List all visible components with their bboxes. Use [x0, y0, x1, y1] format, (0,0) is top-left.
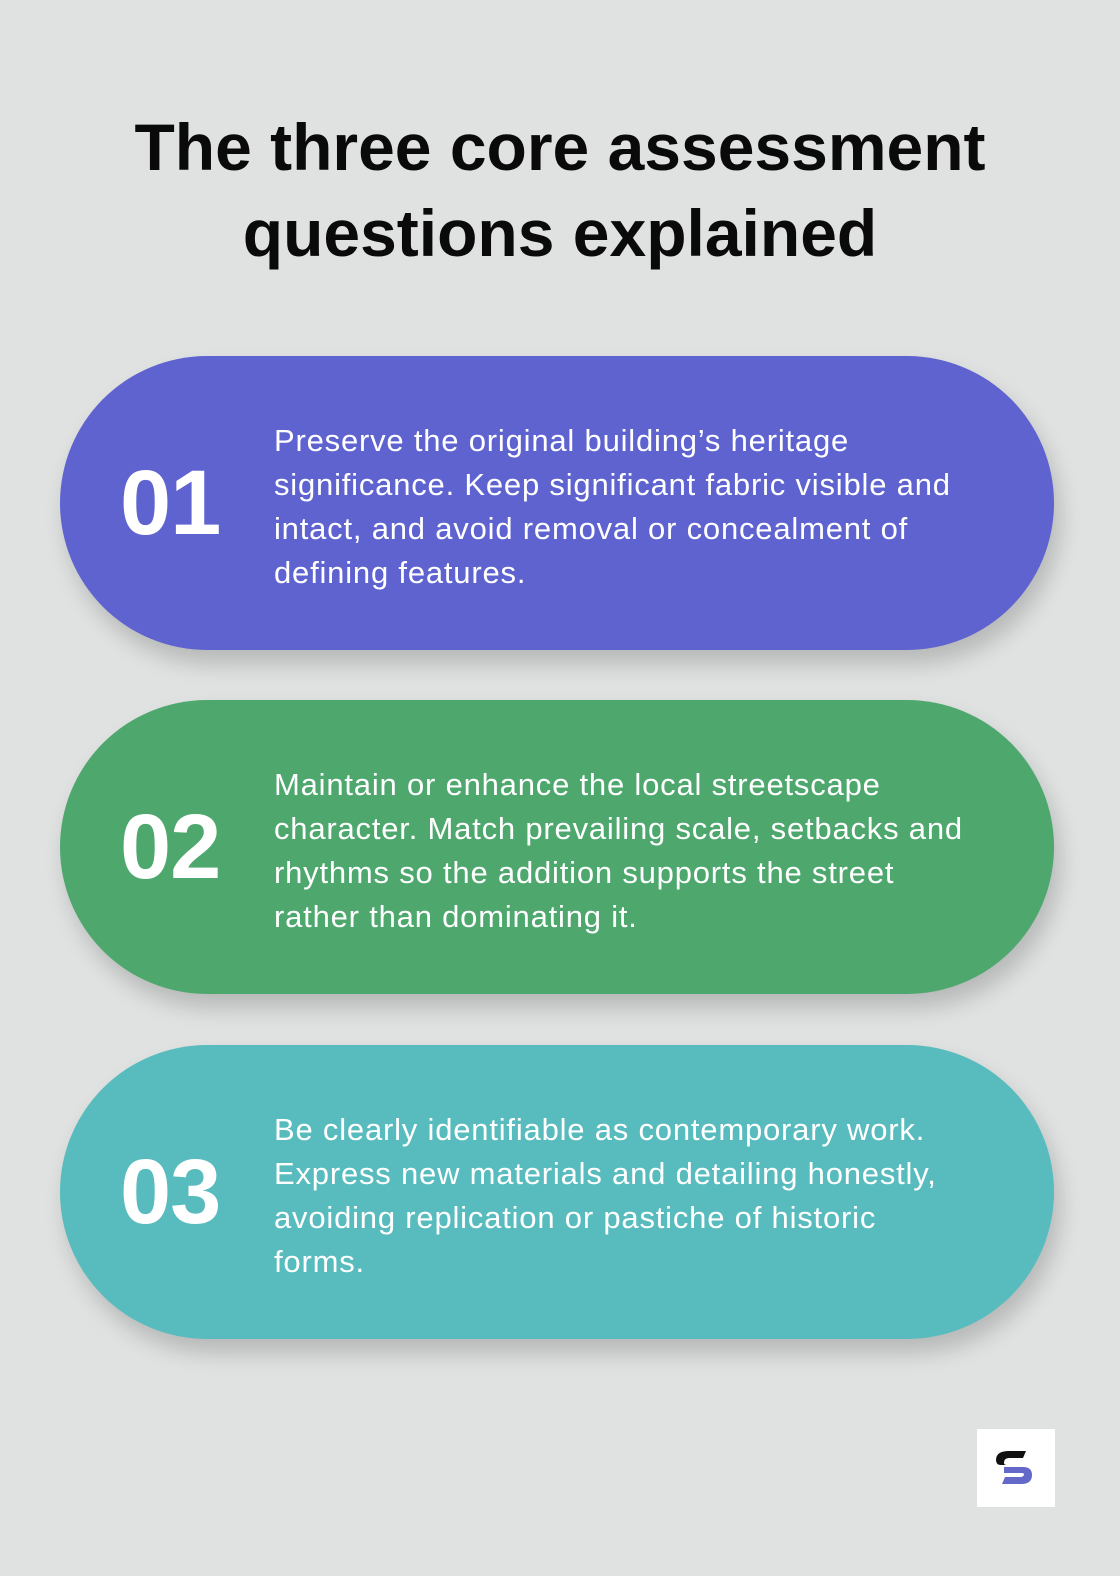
text 02 [274, 767, 963, 934]
number 02: 02 [120, 796, 220, 898]
text 01 [274, 423, 951, 590]
text 02: Maintain or enhance the local streetscape [274, 767, 881, 802]
text 03: forms. [274, 1244, 365, 1279]
text 02: rather than dominating it. [274, 899, 638, 934]
title: questions explained [243, 196, 877, 270]
card 01 [60, 356, 1054, 650]
card 02 [60, 700, 1054, 994]
text 03: Express new materials and detailing honestly, [274, 1156, 937, 1191]
title: The three core assessment [134, 110, 986, 184]
text 03 [274, 1112, 937, 1279]
number 03: 03 [120, 1141, 220, 1243]
text 01: intact, and avoid removal or concealment of [274, 511, 908, 546]
logo [977, 1429, 1055, 1507]
text 01: Preserve the original building’s heritage [274, 423, 849, 458]
text 02: rhythms so the addition supports the street [274, 855, 894, 890]
number 01: 01 [120, 452, 220, 554]
text 02: character. Match prevailing scale, setbacks and [274, 811, 963, 846]
text 01: defining features. [274, 555, 526, 590]
text 03: avoiding replication or pastiche of historic [274, 1200, 876, 1235]
text 03: Be clearly identifiable as contemporary work. [274, 1112, 925, 1147]
card 03 [60, 1045, 1054, 1339]
text 01: significance. Keep significant fabric visible and [274, 467, 951, 502]
title [134, 110, 986, 270]
